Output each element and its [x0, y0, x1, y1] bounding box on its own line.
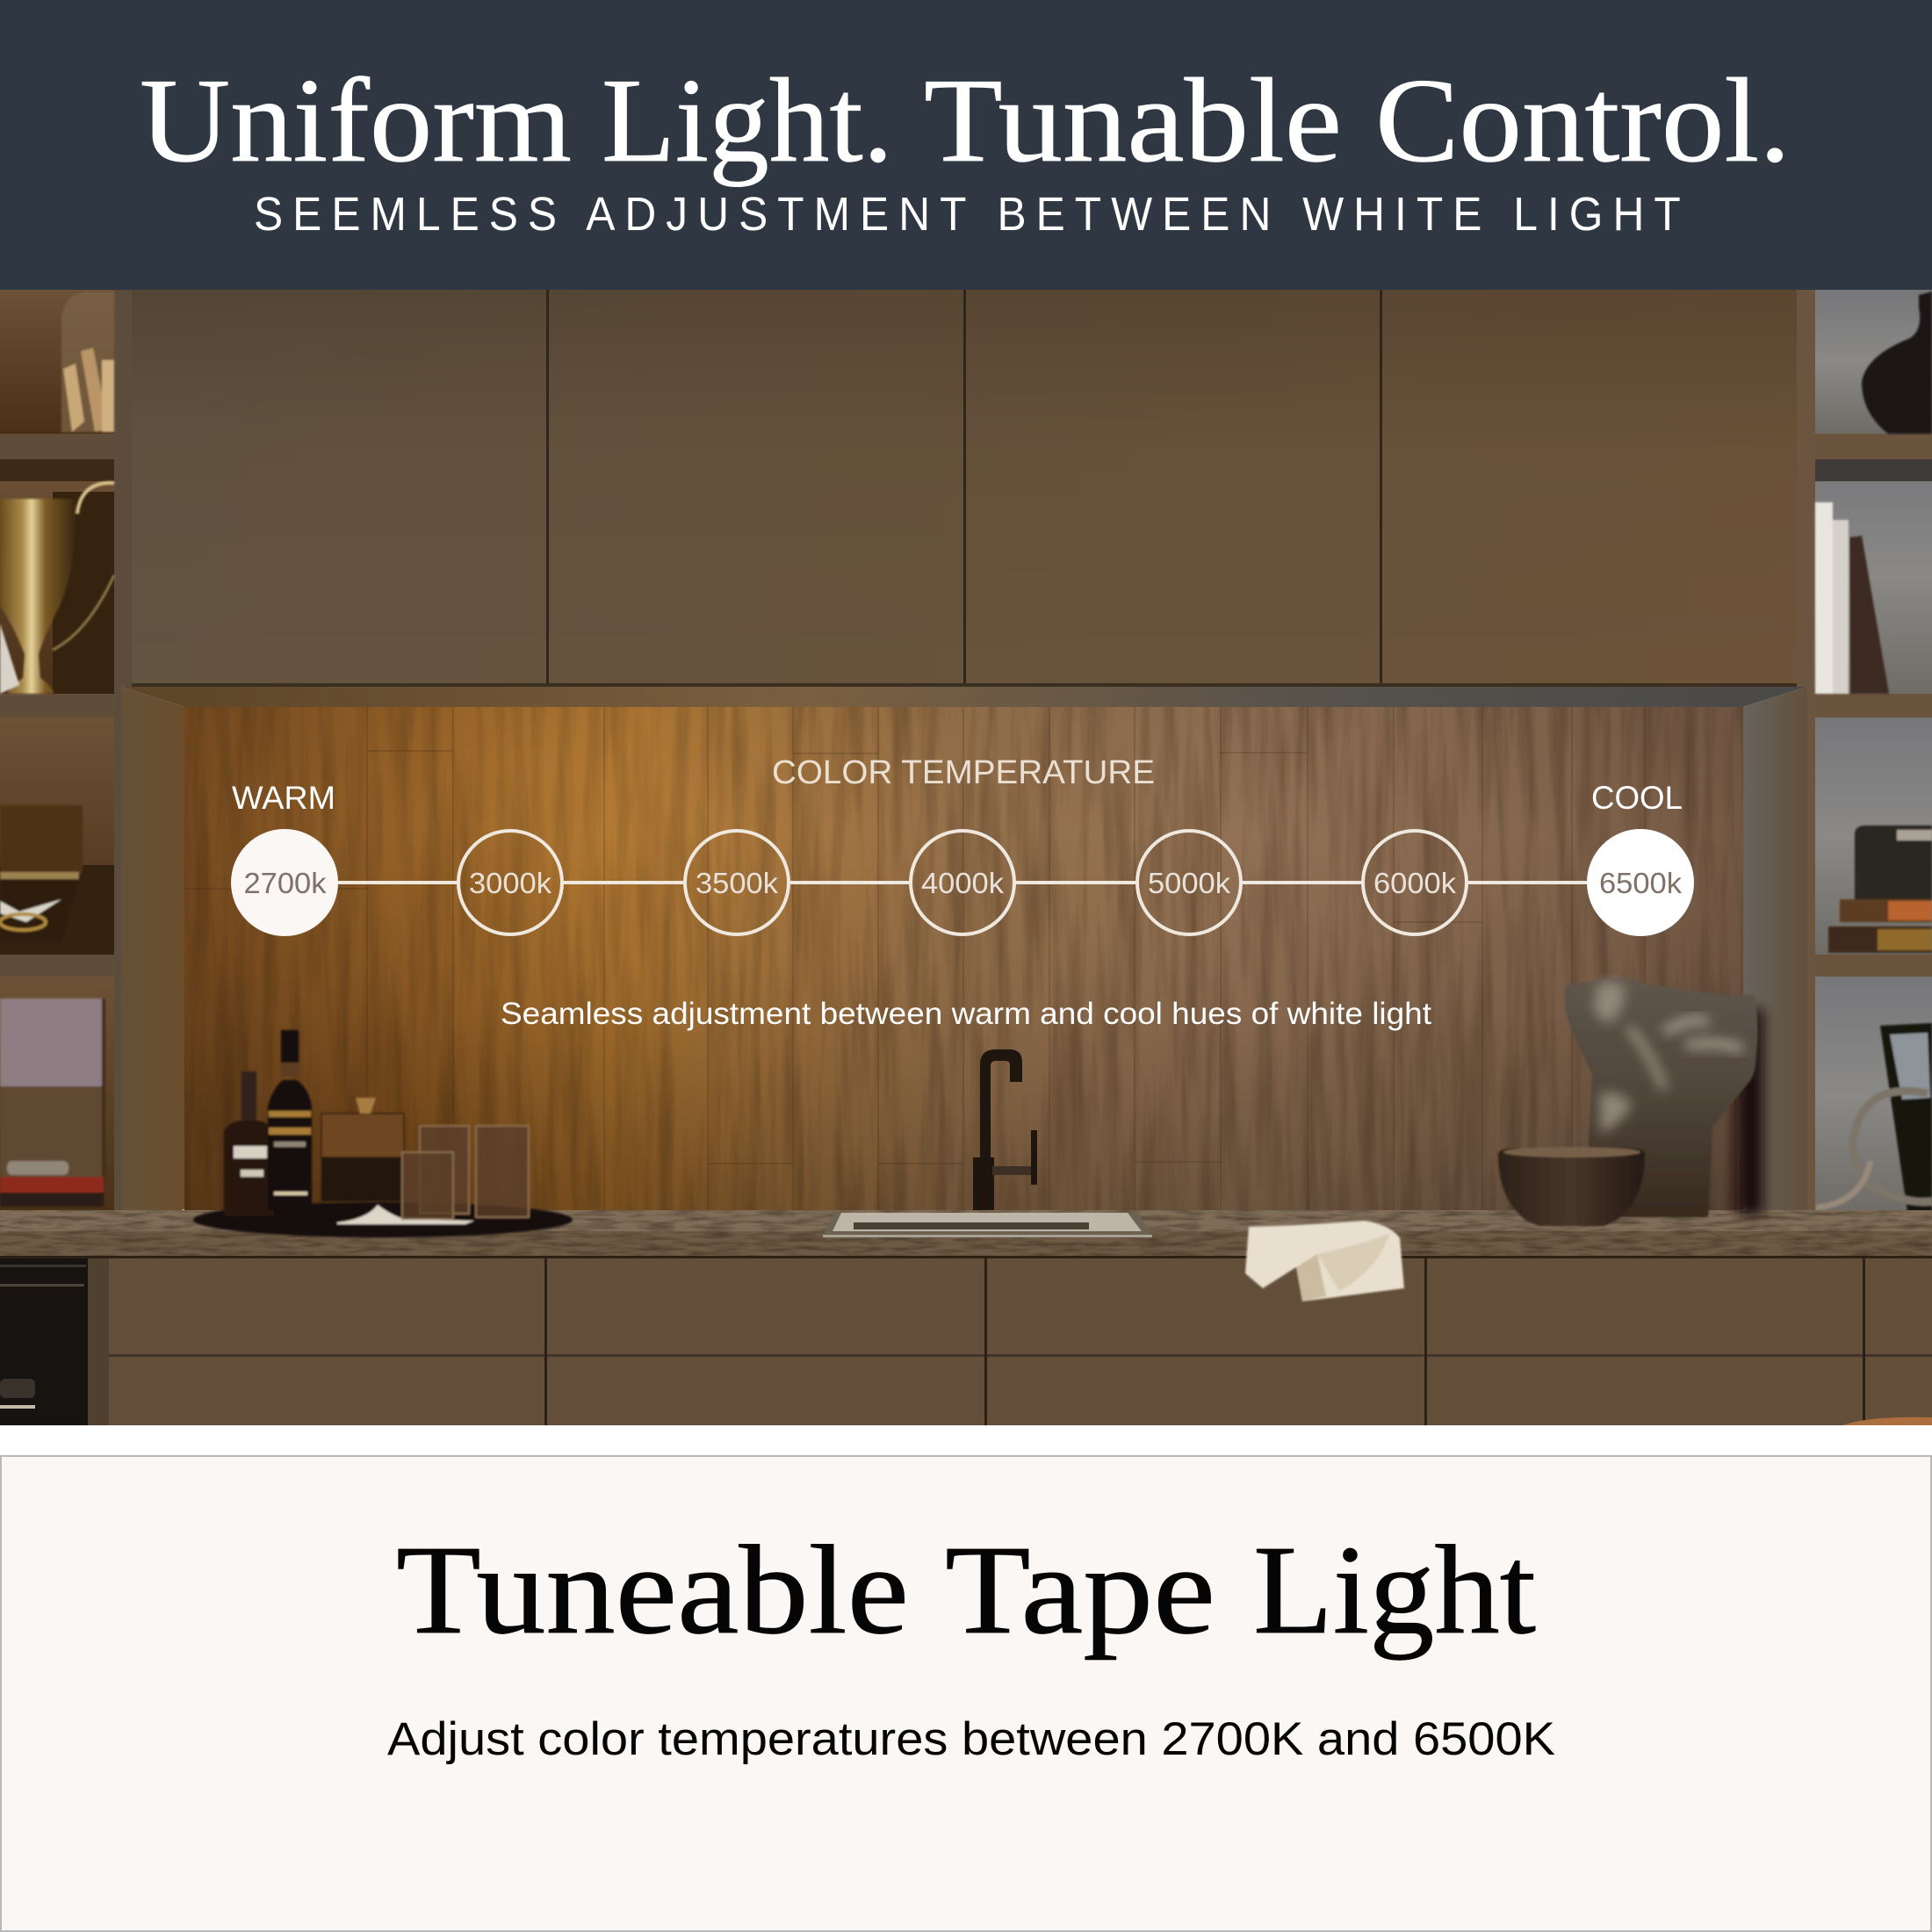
- stop: 3500k: [685, 831, 789, 934]
- title: [140, 54, 1791, 187]
- icon: glass dome with rolls: [61, 292, 114, 432]
- stop: 3000k: [458, 831, 562, 934]
- product description: Adjust color temperatures between 2700K and 6500K: [387, 1713, 1555, 1765]
- color temperature scale: [231, 754, 1694, 1031]
- stop: 2700k: 2700k: [244, 867, 327, 899]
- icon: bottle one: [224, 1071, 274, 1216]
- scale caption: Seamless adjustment between warm and cool hues of white light: [501, 997, 1431, 1031]
- stop: 2700k: [231, 829, 338, 936]
- sink: [823, 1213, 1152, 1237]
- icon: decanter: [321, 1098, 404, 1201]
- product heading: Tape: [945, 1520, 1215, 1661]
- icon: books: [1815, 502, 1889, 694]
- stop: 6000k: 6000k: [1373, 867, 1457, 899]
- soffit under cabinets: [121, 687, 1807, 707]
- stop: 4000k: 4000k: [921, 867, 1005, 899]
- side panels flanking the backsplash: [121, 687, 1807, 1228]
- stop: 5000k: [1137, 831, 1241, 934]
- stop: 6000k: [1363, 831, 1467, 934]
- product heading: Tuneable: [396, 1520, 909, 1661]
- wine fridge: [0, 1258, 88, 1425]
- left shelves: [0, 290, 132, 1228]
- stop: 5000k: 5000k: [1148, 867, 1231, 899]
- photo: kitchen scene: [0, 290, 1932, 1425]
- sculpture and bowl: [1245, 977, 1763, 1301]
- stop: 3500k: 3500k: [696, 867, 779, 899]
- icon: framed photo and chain sculpture: [1816, 1023, 1932, 1212]
- icon: napkin: [337, 1205, 474, 1224]
- title: Tunable: [924, 54, 1342, 187]
- towel: [1245, 1221, 1404, 1301]
- title: Control.: [1375, 54, 1791, 187]
- icon: gold trophy: [0, 483, 114, 694]
- metal sculpture: [1565, 977, 1758, 1217]
- panel: product description: [1, 1456, 1931, 1931]
- dark bowl: [1498, 1147, 1645, 1226]
- faucet and sink: [823, 1049, 1152, 1237]
- label: color temperature: COLOR TEMPERATURE: [772, 754, 1155, 791]
- title: Light.: [602, 54, 893, 187]
- stop: 3000k: 3000k: [469, 867, 552, 899]
- faucet: [973, 1049, 1037, 1210]
- icon: dark vase: [1862, 292, 1932, 434]
- right shelves: [1797, 290, 1932, 1228]
- label: warm: WARM: [232, 780, 335, 816]
- title: Uniform: [140, 54, 572, 187]
- product heading: Light: [1253, 1520, 1536, 1661]
- connecting line: [338, 881, 1587, 884]
- icon: bottle two: [268, 1030, 312, 1210]
- product heading: [396, 1520, 1536, 1661]
- subtitle: SEEMLESS ADJUSTMENT BETWEEN WHITE LIGHT: [254, 187, 1681, 240]
- icon: picture frame and turntable: [0, 998, 105, 1207]
- icon: glasses: [402, 1126, 529, 1219]
- stop: 6500k: 6500k: [1599, 867, 1683, 899]
- icon: open medal box: [0, 805, 83, 941]
- upper cabinets: [121, 290, 1807, 687]
- stop: 6500k: [1587, 829, 1694, 936]
- wood backsplash: [184, 707, 1743, 1210]
- icon: box and stacked books: [1828, 825, 1932, 953]
- label: cool: COOL: [1591, 780, 1683, 816]
- header band: [0, 0, 1932, 290]
- stop: 4000k: [911, 831, 1014, 934]
- tray with bottles and glasses: [193, 1030, 573, 1237]
- lower cabinets: [88, 1258, 1932, 1425]
- countertop: [0, 1210, 1932, 1258]
